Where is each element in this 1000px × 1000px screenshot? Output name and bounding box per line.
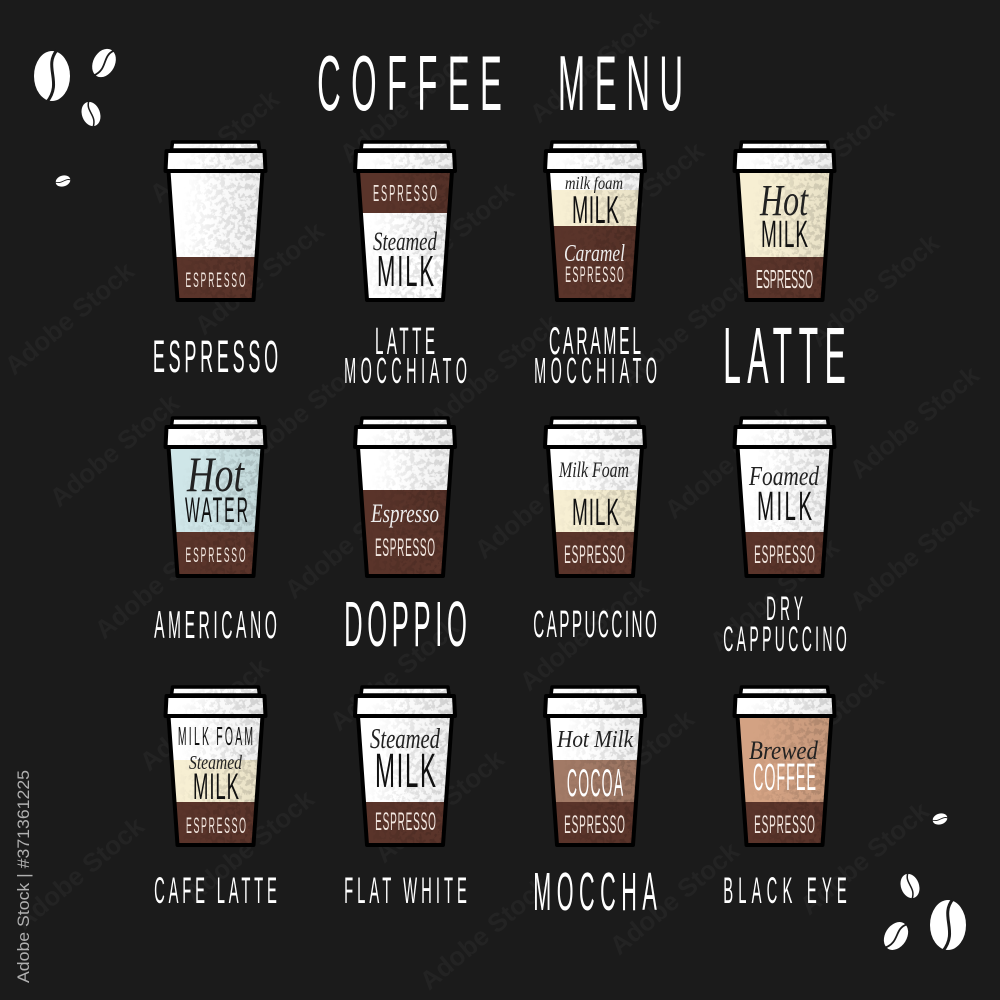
cup: latte macchiato: ESPRESSO [373, 180, 437, 206]
label: doppio: DOPPIO [344, 590, 467, 660]
cup: cafe latte [166, 687, 266, 848]
watermark pattern: Adobe Stock [804, 227, 945, 353]
title: COFFEE [317, 40, 502, 127]
watermark pattern: Adobe Stock [614, 267, 755, 393]
watermark pattern: Adobe Stock [134, 651, 275, 777]
watermark pattern: Adobe Stock [279, 479, 420, 605]
cup: cafe latte: ESPRESSO [186, 813, 246, 838]
cup: americano: Hot [186, 446, 245, 502]
cup: espresso [166, 142, 266, 302]
cup: flat white: Steamed [370, 724, 441, 755]
cup: dry cappuccino: ESPRESSO [754, 542, 815, 570]
cup: latte: Hot [759, 176, 809, 225]
cup: doppio: Espresso [370, 499, 439, 528]
title [317, 40, 683, 127]
cup: dry cappuccino: MILK [757, 483, 812, 529]
watermark pattern: Adobe Stock [44, 387, 185, 513]
label: espresso: ESPRESSO [153, 333, 278, 383]
label: dry cappuccino [723, 591, 847, 659]
cup: cappuccino [545, 418, 645, 579]
cup: black eye [734, 687, 834, 848]
watermark pattern: Adobe Stock [424, 307, 565, 433]
label: caramel macchiato: CARAMEL [549, 320, 641, 363]
watermark pattern: Adobe Stock [234, 347, 375, 473]
cup: flat white [355, 687, 455, 848]
watermark pattern: Adobe Stock [569, 135, 710, 261]
cup: doppio: ESPRESSO [375, 535, 435, 563]
icon: coffee beans top left [34, 44, 121, 189]
watermark pattern: Adobe Stock [189, 215, 330, 341]
label: americano: AMERICANO [154, 604, 277, 647]
label: moccha: MOCCHA [533, 861, 657, 922]
cup: caramel macchiato: milk foam [565, 173, 623, 193]
cup: black eye: COFFEE [753, 757, 816, 799]
watermark pattern: Adobe Stock [324, 611, 465, 737]
cup: caramel macchiato [545, 142, 645, 303]
watermark pattern: Adobe Stock [759, 95, 900, 221]
label: black eye: BLACK EYE [723, 869, 847, 911]
cup: black eye: ESPRESSO [754, 812, 815, 840]
label: flat white: FLAT WHITE [344, 869, 467, 911]
watermark pattern: Adobe Stock [704, 531, 845, 657]
watermark pattern: Adobe Stock [0, 255, 140, 381]
watermark pattern: Adobe Stock [414, 870, 555, 996]
label: latte macchiato: MOCCHIATO [344, 350, 467, 391]
cup: cappuccino: Milk Foam [558, 457, 629, 482]
cup: cafe latte: Steamed [189, 752, 243, 774]
watermark pattern: Adobe Stock [794, 795, 935, 921]
cup: black eye: Brewed [749, 736, 819, 765]
watermark pattern: Adobe Stock [89, 519, 230, 645]
watermark pattern: Adobe Stock [469, 439, 610, 565]
cup: mocha: ESPRESSO [564, 812, 625, 840]
label: latte macchiato: LATTE [375, 321, 435, 363]
watermark pattern: Adobe Stock [604, 835, 745, 961]
cup: cappuccino: ESPRESSO [564, 542, 625, 570]
cup: americano: WATER [185, 490, 248, 530]
label: caramel macchiato [534, 320, 657, 391]
watermark pattern: Adobe Stock [749, 663, 890, 789]
cup: latte: MILK [761, 214, 808, 256]
watermark pattern: Adobe Stock [844, 491, 985, 617]
watermark pattern: Adobe Stock [179, 783, 320, 909]
label: dry cappuccino: DRY [766, 591, 803, 628]
cup: mocha: Hot Milk [556, 727, 633, 753]
cup: dry cappuccino: Foamed [748, 461, 819, 491]
cup: latte macchiato [355, 142, 455, 303]
watermark pattern: Adobe Stock [369, 743, 510, 869]
cup: cappuccino: MILK [572, 492, 619, 534]
label: dry cappuccino: CAPPUCCINO [723, 619, 847, 659]
watermark pattern: Adobe Stock [9, 810, 150, 936]
cup: cafe latte: MILK [193, 767, 239, 808]
label: latte: LATTE [723, 311, 846, 400]
cup: americano [166, 418, 266, 579]
cup: flat white: MILK [375, 745, 436, 798]
cup: latte macchiato: MILK [377, 248, 434, 296]
cup: americano: ESPRESSO [185, 545, 246, 567]
cup: latte: ESPRESSO [756, 266, 813, 295]
watermark pattern: Adobe Stock [379, 175, 520, 301]
watermark pattern: Adobe Stock [524, 3, 665, 129]
cup: cafe latte: MILK FOAM [178, 723, 253, 752]
cup: latte [734, 142, 834, 302]
cup: mocha: COCOA [567, 761, 623, 805]
watermark pattern: Adobe Stock [559, 703, 700, 829]
cup: caramel macchiato: MILK [572, 188, 619, 232]
label: cafe latte: CAFE LATTE [154, 869, 277, 911]
watermark pattern: Adobe Stock [844, 359, 985, 485]
stock id text: Adobe Stock | #371361225 [14, 770, 33, 983]
icon: coffee beans bottom right [879, 811, 966, 955]
cup: latte macchiato: Steamed [373, 227, 438, 256]
label: cappuccino: CAPPUCCINO [533, 604, 657, 646]
watermark pattern: Adobe Stock [334, 43, 475, 169]
label: latte macchiato [344, 321, 467, 391]
cup: flat white: ESPRESSO [375, 809, 436, 837]
watermark pattern: Adobe Stock [659, 399, 800, 525]
cup: mocha [545, 687, 645, 848]
watermark pattern: Adobe Stock [144, 83, 285, 209]
cup: caramel macchiato: Caramel [564, 241, 625, 267]
label: caramel macchiato: MOCCHIATO [534, 350, 657, 391]
watermark pattern: Adobe Stock [514, 571, 655, 697]
cup: espresso: ESPRESSO [185, 270, 246, 292]
title: MENU [558, 40, 683, 127]
cup: doppio [355, 418, 455, 579]
cup: dry cappuccino [734, 418, 834, 579]
cup: caramel macchiato: ESPRESSO [565, 262, 624, 287]
